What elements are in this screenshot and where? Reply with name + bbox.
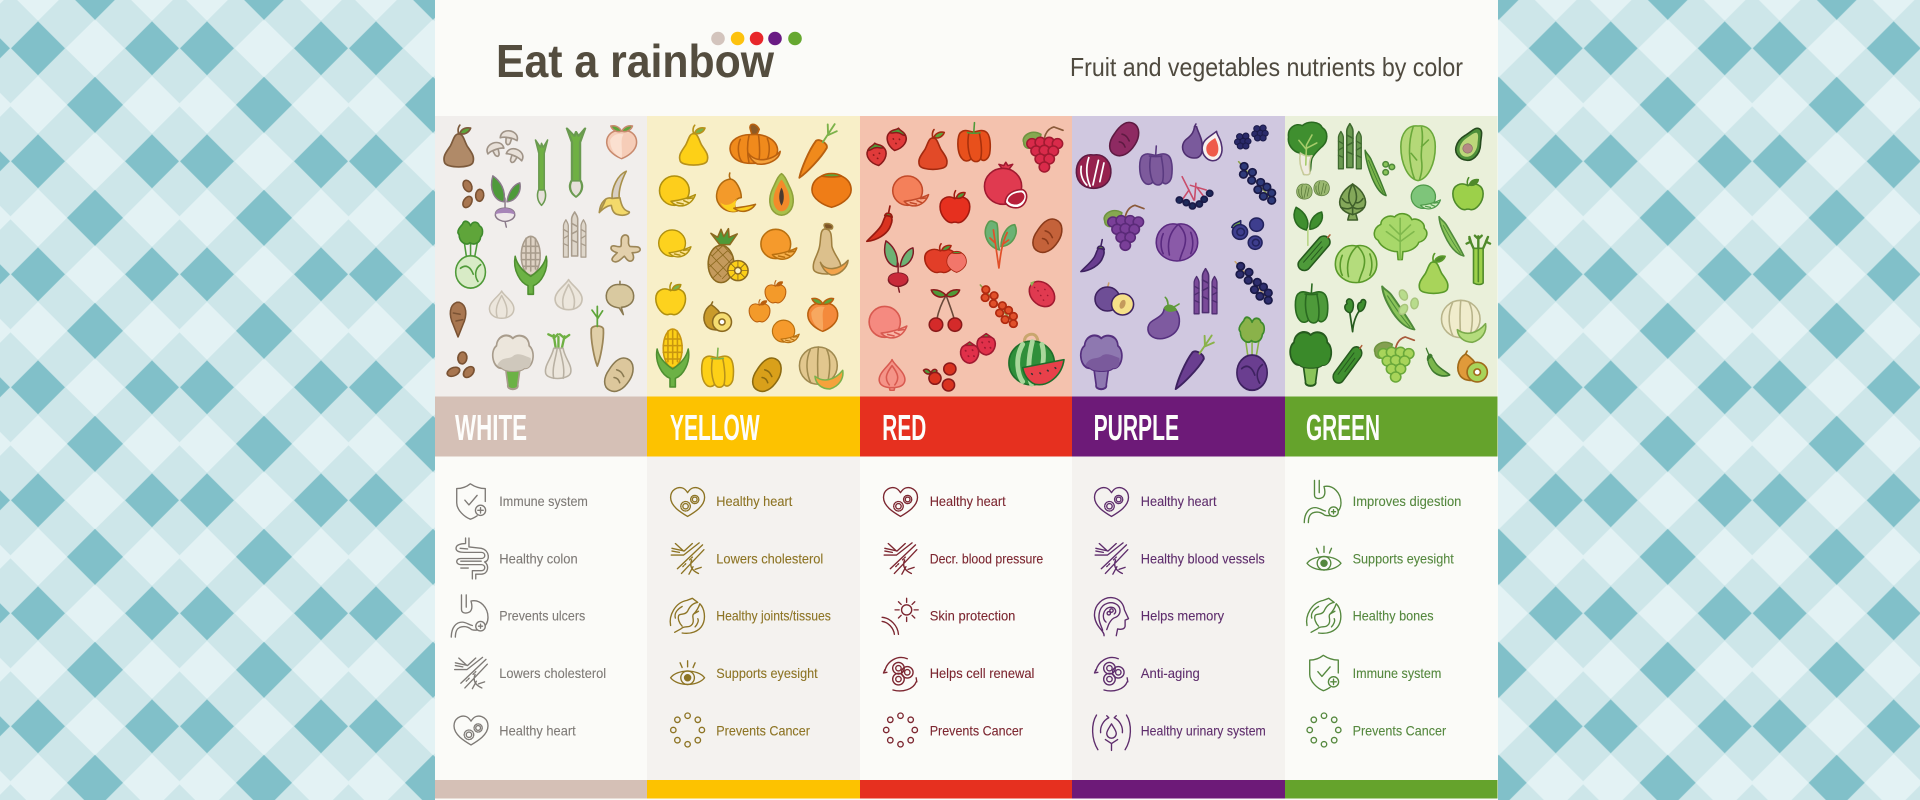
icon: green pea pod	[1382, 286, 1414, 330]
icon: colon	[456, 538, 488, 579]
panel: green fruits background	[1285, 116, 1498, 397]
icon: ginger	[611, 235, 640, 262]
heading: WHITE: WHITE	[455, 407, 527, 448]
illustrations: white fruit and vegetables	[443, 125, 640, 396]
icon: lime	[1411, 185, 1440, 209]
icon: persimmon	[812, 173, 851, 207]
icon: joints	[1307, 598, 1341, 633]
icon: blood vessels	[1095, 543, 1128, 574]
icon: tomato	[925, 244, 956, 273]
icon: papaya	[770, 174, 793, 215]
illustrations: purple fruit and vegetables	[1076, 118, 1275, 393]
icon: honeydew melon	[1441, 300, 1486, 342]
panel: purple fruits background	[1072, 116, 1285, 397]
icon: golden potato	[748, 354, 786, 396]
label: Decr. blood pressure	[930, 550, 1043, 566]
main white panel	[435, 0, 1498, 800]
icon: eye	[671, 661, 705, 685]
icon: cherry tomato vine	[980, 285, 1017, 327]
icon: radish	[885, 241, 913, 292]
icon: joints	[670, 598, 704, 633]
icon: red potato	[1029, 215, 1067, 257]
icon: heart	[1094, 488, 1128, 516]
icon: carrot	[794, 121, 840, 181]
heading: RED: RED	[882, 407, 926, 448]
icon: mango	[717, 173, 755, 212]
icon: butternut squash	[813, 223, 848, 275]
icon: leek	[567, 128, 585, 197]
label: Supports eyesight	[716, 665, 818, 681]
icon: cherries	[929, 290, 962, 331]
purple column benefit background	[1072, 456, 1285, 780]
red items right part	[958, 123, 1067, 385]
icon: yellow apple	[656, 283, 686, 315]
icon: cells	[1094, 658, 1128, 691]
icon: urinary system	[1093, 715, 1130, 750]
icon: blood vessels	[671, 543, 704, 574]
icon: cell ring	[884, 713, 918, 747]
label: Supports eyesight	[1353, 550, 1454, 566]
header band: purple	[1072, 396, 1285, 456]
label: Healthy joints/tissues	[716, 608, 831, 624]
checkered background left	[0, 0, 436, 800]
icon: scallion	[535, 140, 548, 205]
icon: raspberry	[977, 334, 995, 355]
icon: purple potato	[1105, 118, 1144, 161]
icon: green apple	[1453, 178, 1483, 210]
label: Healthy colon	[499, 550, 578, 566]
icon: green asparagus	[1338, 124, 1361, 169]
yellow column benefit background	[647, 456, 860, 780]
icon: heart	[671, 488, 705, 516]
label: Skin protection	[930, 608, 1015, 624]
icon: blood vessels	[455, 657, 487, 689]
icon: green pear	[1419, 254, 1448, 293]
icon: tangerine	[772, 320, 799, 343]
icon: stomach	[1304, 480, 1341, 523]
icon: banana	[599, 171, 629, 215]
icon: lemon	[659, 230, 691, 257]
icon: pumpkin	[730, 124, 780, 164]
header band: green	[1285, 396, 1498, 456]
icon: chili pepper	[867, 206, 892, 241]
label: Helps cell renewal	[930, 665, 1034, 681]
icon: arugula	[1345, 299, 1366, 332]
icon: cantaloupe	[799, 347, 843, 389]
icon: green bean	[1439, 217, 1464, 256]
icon: shield	[457, 484, 486, 519]
illustrations: red fruit and vegetables	[865, 123, 1067, 391]
icon: heart	[454, 716, 488, 745]
icon: romaine	[1401, 126, 1435, 181]
icon: kohlrabi	[456, 221, 485, 288]
icon: purple chili	[1081, 240, 1104, 272]
panel: yellow fruits background	[647, 116, 860, 397]
label: Prevents Cancer	[930, 722, 1023, 738]
icon: dragon fruit	[1024, 276, 1060, 312]
heading: GREEN: GREEN	[1306, 407, 1380, 448]
label: Anti-aging	[1141, 665, 1200, 681]
icon: plum	[1095, 283, 1134, 315]
icon: white corn	[515, 236, 547, 294]
icon: red grapes	[1023, 127, 1063, 172]
label: Immune system	[1353, 665, 1441, 681]
title: Eat a rainbow	[496, 35, 774, 87]
icon: tomato slice	[947, 251, 966, 272]
icon: chard	[985, 221, 1016, 268]
icon: red cabbage	[1156, 224, 1198, 261]
label: Healthy heart	[716, 493, 792, 509]
label: Prevents ulcers	[499, 608, 585, 624]
icon: lima beans	[1397, 289, 1419, 316]
icon: pea pod	[1365, 150, 1386, 196]
icon: turnip	[606, 281, 634, 315]
icon: avocado	[1451, 123, 1489, 164]
icon: cell ring	[1307, 713, 1341, 747]
icon: root	[450, 302, 466, 337]
icon: blueberries	[1232, 218, 1263, 249]
icon: orange	[761, 229, 797, 259]
icon: green grapes	[1375, 337, 1414, 382]
icon: shallot	[879, 360, 905, 390]
icon: cherry tomatoes	[923, 363, 956, 391]
icon: red pear	[919, 130, 947, 169]
icon: apricot	[765, 281, 786, 303]
icon: elderberries	[1176, 177, 1213, 209]
label: Improves digestion	[1353, 493, 1461, 509]
icon: artichoke	[1340, 184, 1366, 220]
label: Healthy blood vessels	[1141, 550, 1265, 566]
benefits list: white	[451, 484, 606, 745]
checkered background right	[1497, 0, 1920, 800]
icon: zucchini	[1331, 342, 1366, 386]
icon: eye	[1307, 546, 1341, 570]
label: Prevents Cancer	[1353, 722, 1446, 738]
icon: blackberries	[1234, 125, 1268, 149]
label: Healthy heart	[499, 722, 576, 738]
label: Lowers cholesterol	[716, 550, 823, 566]
panel: white fruits background	[435, 116, 647, 397]
icon: pomegranate	[984, 162, 1027, 208]
icon: purple cauliflower	[1081, 335, 1122, 389]
benefits list: purple	[1093, 488, 1266, 750]
footer bar: yellow	[647, 780, 860, 798]
colour dots	[711, 32, 802, 45]
icon: pineapple	[708, 229, 748, 283]
icon: berries on a stem	[1235, 262, 1272, 304]
icon: apricot	[749, 300, 770, 322]
icon: purple grapes	[1104, 205, 1144, 250]
icon: cabbage	[1335, 246, 1377, 283]
icon: shield	[1310, 655, 1339, 691]
icon: pink grapefruit	[869, 306, 907, 338]
icon: potato	[600, 354, 638, 396]
icon: garlic	[555, 280, 582, 310]
icon: peas	[1383, 162, 1395, 175]
icon: parsnip	[591, 306, 603, 366]
icon: celery	[1467, 236, 1490, 284]
icon: cell ring	[671, 713, 705, 747]
icon: yellow corn	[657, 329, 689, 387]
icon: green pepper	[1295, 284, 1328, 323]
icon: stomach	[451, 595, 488, 637]
icon: leaf lettuce	[1374, 214, 1427, 260]
heading: YELLOW: YELLOW	[670, 407, 760, 448]
icon: brussels sprout	[1297, 184, 1312, 199]
icon: blood vessels	[884, 543, 917, 574]
icon: heart	[884, 488, 918, 516]
label: Helps memory	[1141, 608, 1224, 624]
icon: kiwi	[1458, 351, 1487, 382]
icon: purple kohlrabi	[1237, 317, 1267, 390]
icon: green chili	[1425, 340, 1450, 384]
icon: cauliflower	[493, 335, 533, 389]
red items left part	[865, 127, 970, 391]
illustrations: yellow fruit and vegetables	[656, 121, 851, 396]
icon: currants	[1239, 162, 1275, 204]
icon: peach	[607, 126, 637, 159]
icon: pear	[444, 125, 473, 167]
footer bar: red	[860, 780, 1072, 798]
icon: eggplant	[1148, 297, 1179, 339]
subtitle: Fruit and vegetables nutrients by color	[1070, 52, 1463, 82]
icon: purple asparagus	[1194, 269, 1217, 314]
heading: PURPLE: PURPLE	[1094, 407, 1179, 448]
icon: purple carrot	[1170, 332, 1217, 393]
footer bar: white	[435, 780, 647, 798]
icon: beans	[461, 179, 484, 209]
icon: sun on skin	[882, 598, 918, 634]
icon: cucumber	[1296, 231, 1335, 273]
icon: lettuce	[1288, 122, 1327, 175]
icon: cells	[884, 658, 917, 691]
icon: strawberry	[885, 127, 908, 152]
icon: yellow pepper	[702, 348, 733, 387]
header band: yellow	[647, 396, 860, 456]
header band: red	[860, 396, 1072, 456]
label: Immune system	[499, 493, 588, 509]
header band: white	[435, 396, 647, 456]
icon: red apple	[940, 191, 970, 223]
icon: broccoli	[1290, 332, 1331, 386]
icon: red pepper	[958, 123, 990, 162]
icon: golden kiwi	[704, 302, 731, 331]
icon: watermelon	[1009, 334, 1064, 385]
icon: brown beans	[443, 349, 482, 386]
label: Healthy bones	[1353, 608, 1434, 624]
title block	[496, 32, 802, 87]
icon: garlic	[489, 291, 514, 318]
icon: blood orange	[893, 176, 929, 206]
icon: fig	[1183, 124, 1222, 161]
footer bar: purple	[1072, 780, 1285, 798]
footer bar: green	[1285, 780, 1498, 798]
icon: brussels sprout	[1314, 181, 1329, 196]
label: Healthy heart	[1141, 493, 1217, 509]
icon: yellow pear	[680, 125, 708, 165]
icon: asparagus	[563, 212, 586, 257]
icon: peach	[808, 298, 838, 331]
icon: head with brain	[1094, 598, 1128, 636]
panel: red fruits background	[860, 116, 1072, 397]
illustrations: green fruit and vegetables	[1288, 122, 1490, 386]
benefits list: yellow	[670, 488, 831, 747]
icon: purple pepper	[1140, 146, 1172, 185]
icon: raspberry	[961, 342, 979, 363]
benefits list: red	[882, 488, 1043, 747]
label: Healthy heart	[930, 493, 1006, 509]
icon: strawberry	[865, 142, 888, 167]
benefits list: green	[1304, 480, 1461, 747]
icon: turnip with leaves	[492, 176, 520, 227]
label: Lowers cholesterol	[499, 665, 606, 681]
icon: radicchio	[1076, 155, 1111, 188]
icon: mushrooms	[485, 129, 525, 166]
icon: spinach	[1294, 207, 1322, 245]
label: Prevents Cancer	[716, 722, 810, 738]
icon: grapefruit	[660, 176, 695, 206]
label: Healthy urinary system	[1141, 722, 1266, 738]
icon: fennel	[545, 334, 571, 378]
